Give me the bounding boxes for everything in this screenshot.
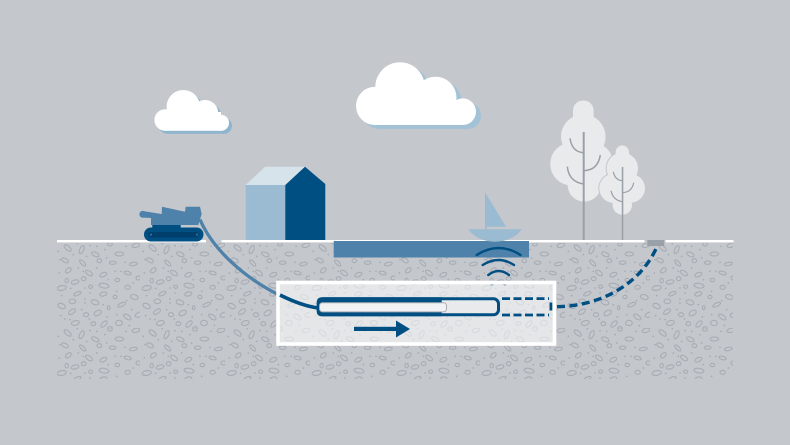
sailboat — [468, 192, 522, 242]
cutaway detail box — [278, 282, 554, 344]
drill path from rig — [200, 220, 279, 295]
dashed exit path — [557, 247, 657, 307]
large cloud — [356, 62, 481, 129]
small cloud — [154, 90, 232, 134]
drilling rig — [139, 207, 204, 242]
inner pipe — [320, 303, 446, 312]
casing dark section — [317, 297, 442, 316]
large tree — [550, 100, 613, 240]
pipe feed line — [280, 295, 318, 308]
water — [334, 241, 529, 258]
small tree — [598, 146, 646, 240]
pipe casing — [318, 299, 498, 315]
signal waves — [477, 248, 520, 284]
house — [246, 167, 325, 240]
soil ground texture — [57, 243, 733, 379]
ground surface line — [57, 240, 734, 242]
direction arrow — [354, 320, 410, 338]
bore end cap — [550, 302, 552, 310]
exit point marker — [647, 240, 664, 246]
dashed planned bore — [502, 299, 549, 315]
